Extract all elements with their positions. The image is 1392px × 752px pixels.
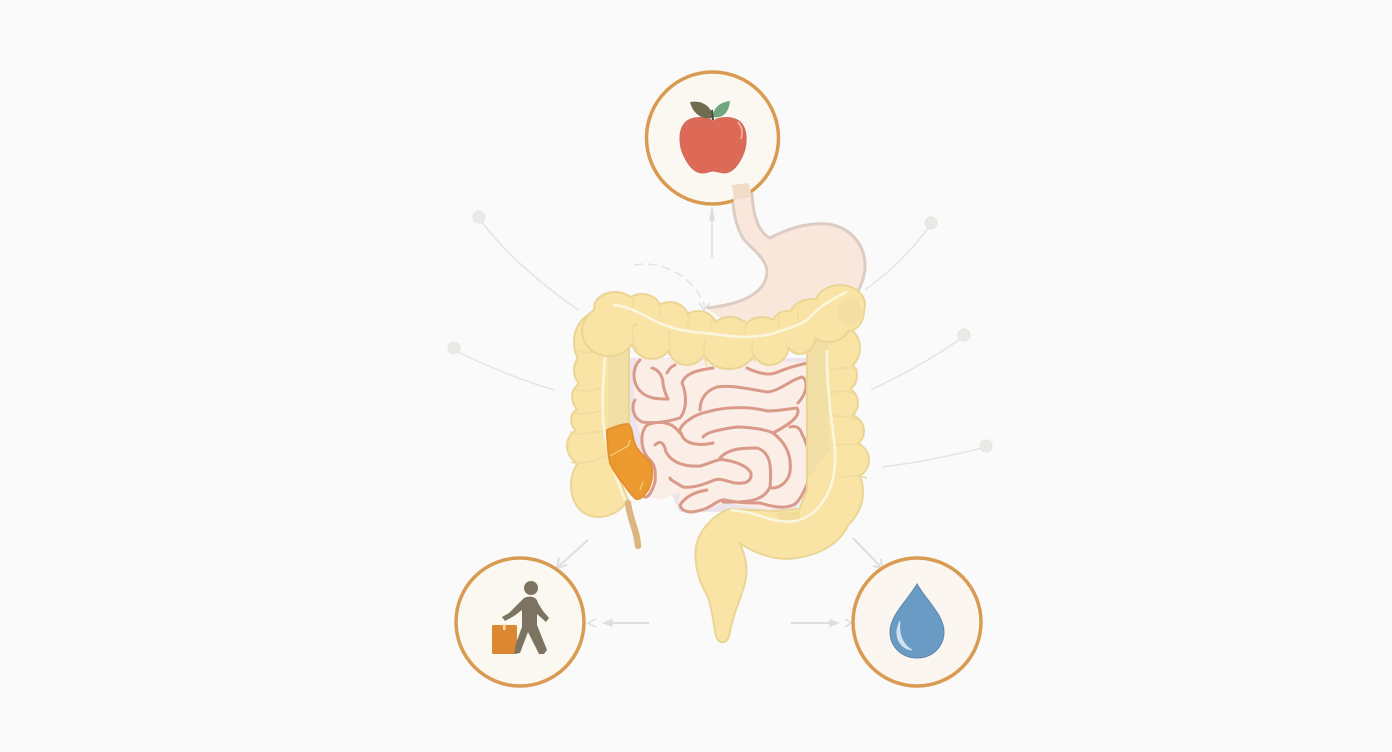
small intestine (628, 358, 815, 515)
appendix (628, 503, 638, 546)
icon: person with suitcase in circle (456, 558, 584, 686)
inflamed orange section (607, 424, 652, 499)
icon: water drop in circle (853, 558, 981, 686)
transverse colon (583, 286, 864, 368)
ascending and descending colon with rectum (568, 314, 868, 641)
icon: apple in circle (646, 72, 778, 204)
stomach and esophagus (707, 183, 865, 325)
arrows (557, 207, 882, 627)
connector lines with end dots (448, 211, 992, 467)
